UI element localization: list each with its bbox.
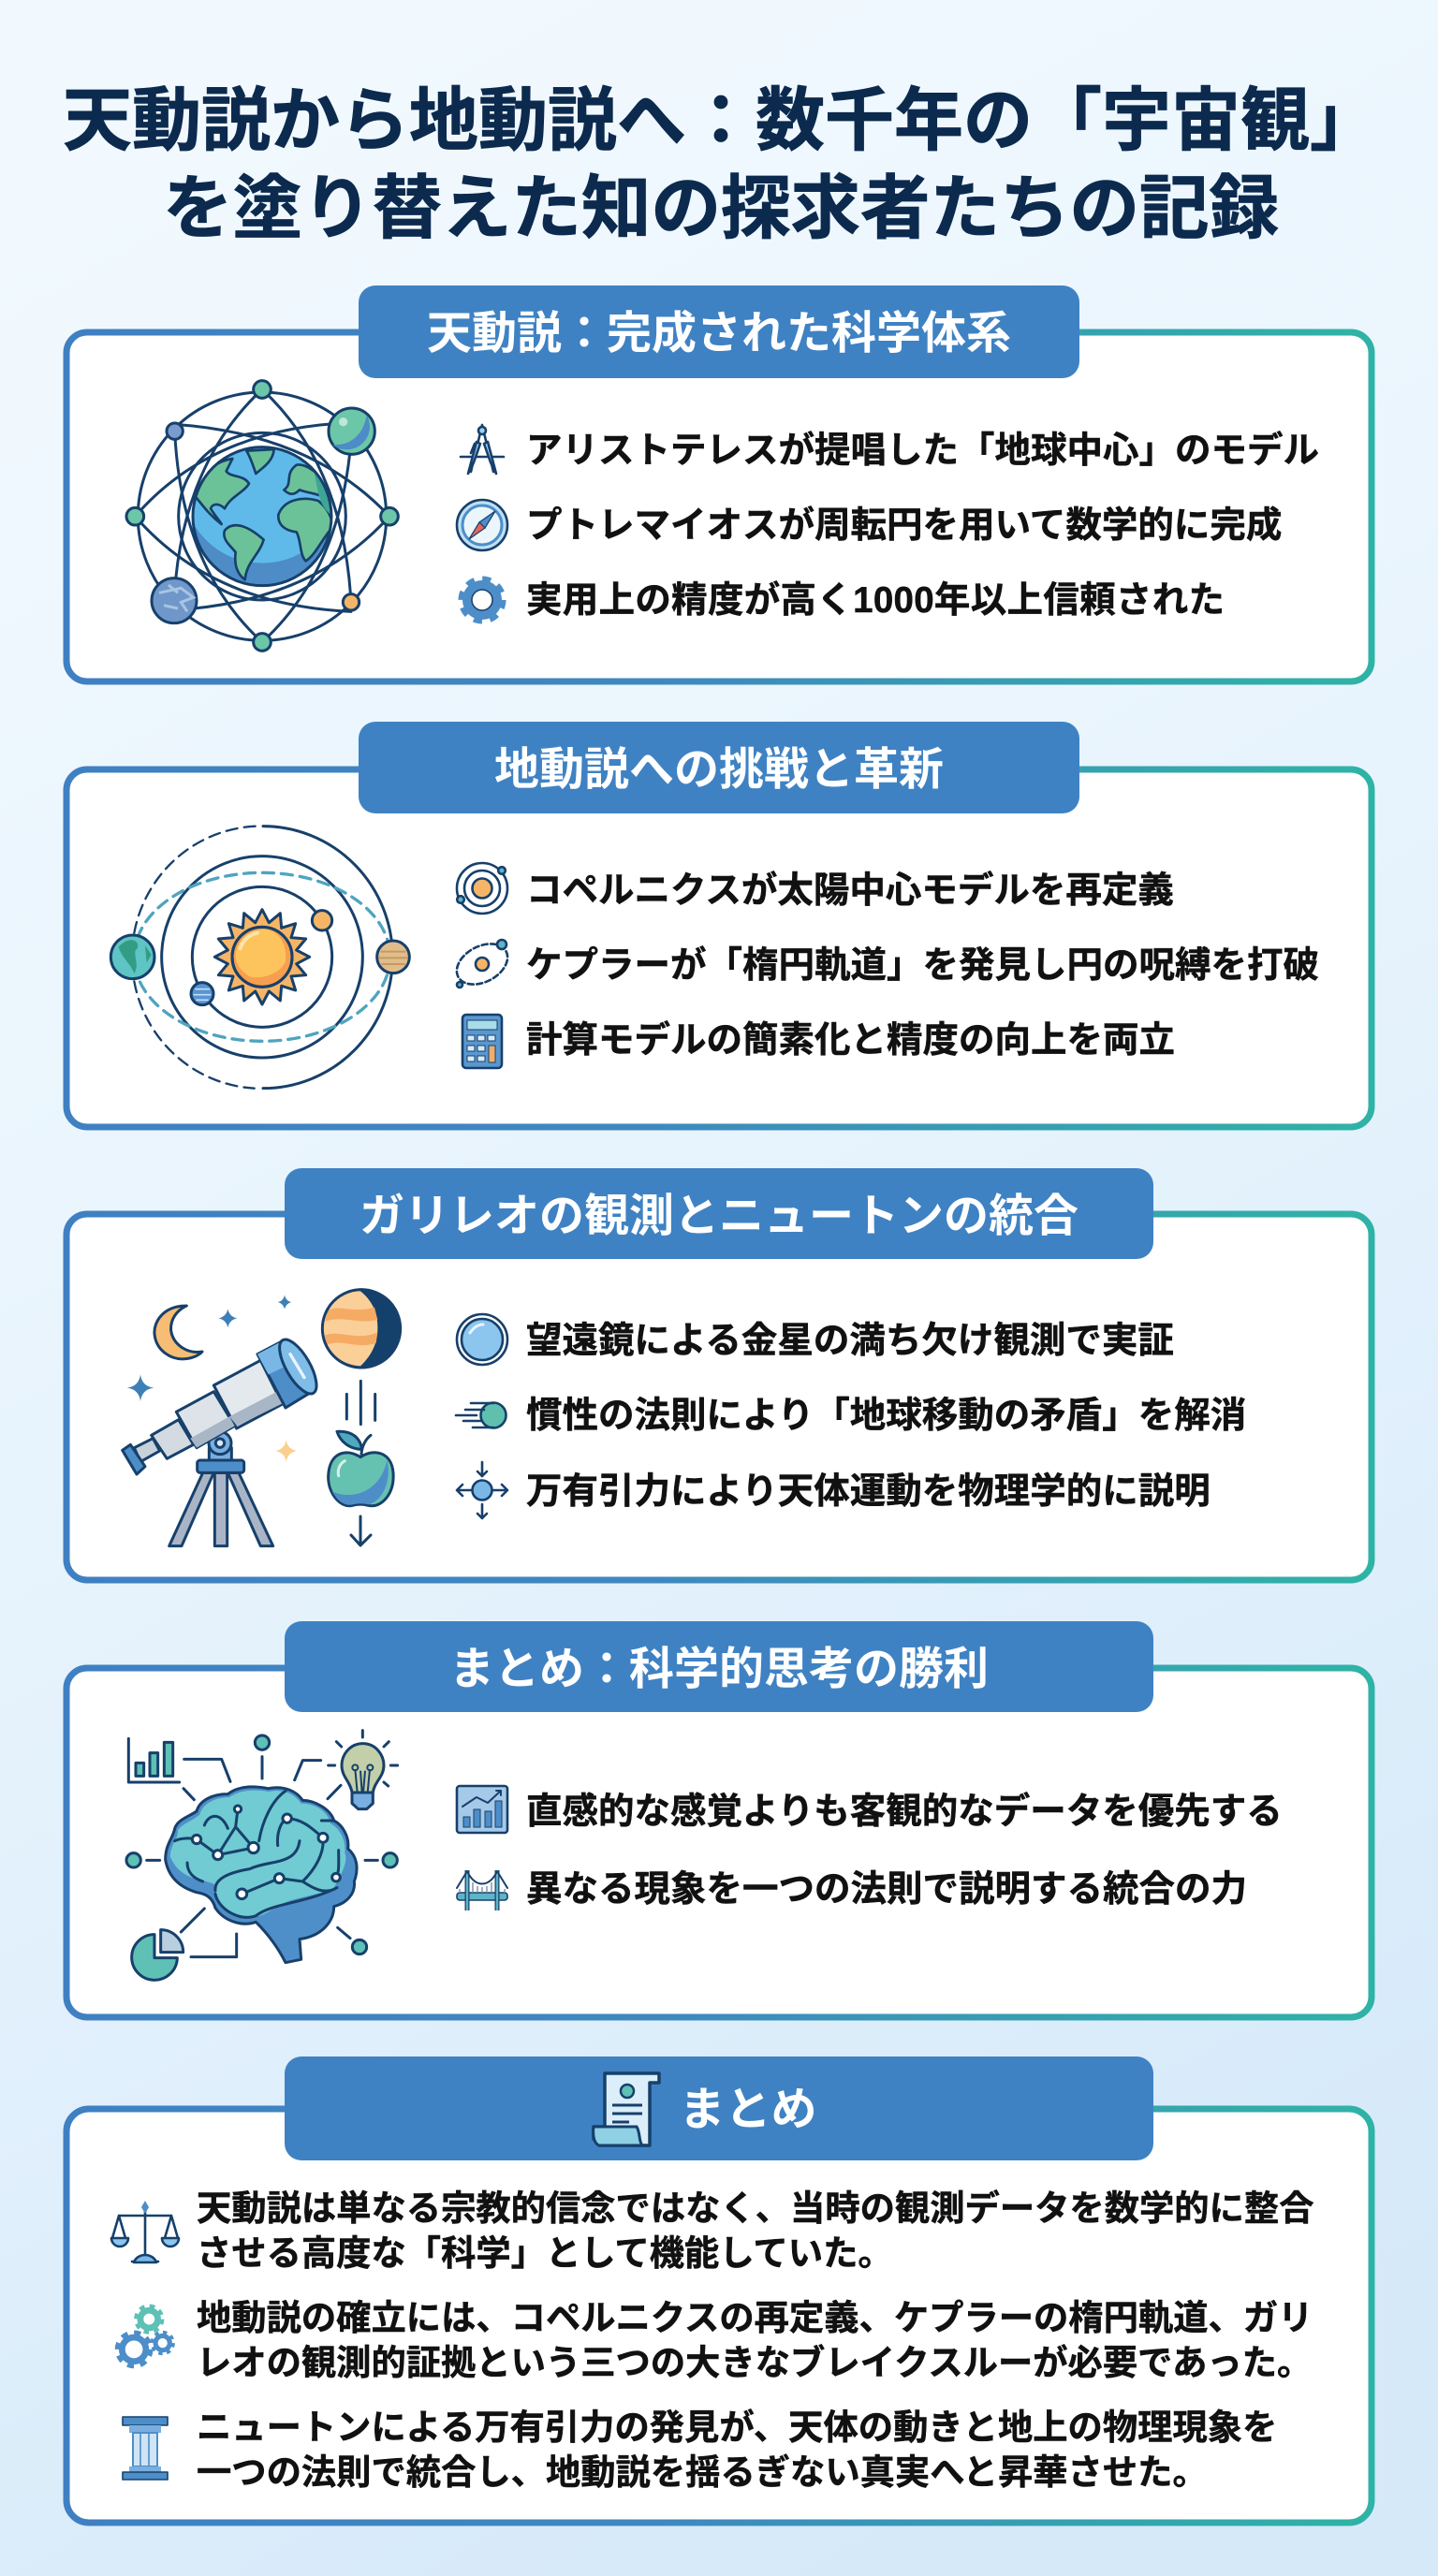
title: を塗り替えた知の探求者たちの記録 <box>163 169 1279 247</box>
header <box>285 1168 1153 1259</box>
header: まとめ：科学的思考の勝利 <box>449 1645 989 1694</box>
sun <box>214 910 310 1004</box>
header: 天動説: 天動説：完成された科学体系 <box>427 309 1011 359</box>
icon: dividers <box>461 425 504 474</box>
bullet text: 望遠鏡による金星の満ち欠け観測で実証 <box>526 1321 1174 1361</box>
header: まとめ <box>679 2085 817 2135</box>
moon <box>154 1306 202 1359</box>
icon: calculator <box>462 1015 502 1068</box>
nodes <box>126 1735 397 1954</box>
title <box>63 81 1379 247</box>
summary text: 一つの法則で統合し、地動説を揺るぎない真実へと昇華させた。 <box>197 2452 1208 2492</box>
icon: pillar <box>123 2417 168 2480</box>
header: 地動説: 地動説への挑戦と革新 <box>494 745 944 795</box>
brain <box>166 1787 357 1963</box>
pie <box>132 1930 183 1980</box>
icon: bridge <box>457 1870 507 1910</box>
icon: gravity arrows <box>457 1462 507 1518</box>
illustration: heliocentric model <box>110 827 409 1089</box>
icon: sun orbit <box>457 863 507 914</box>
bullet text: 異なる現象を一つの法則で説明する統合の力 <box>526 1869 1247 1910</box>
falling lines <box>346 1381 375 1425</box>
summary text: させる高度な「科学」として機能していた。 <box>197 2233 893 2273</box>
planets <box>110 911 409 1005</box>
icon: gear <box>462 580 502 620</box>
header <box>285 2056 1153 2160</box>
summary text: ニュートンによる万有引力の発見が、天体の動きと地上の物理現象を <box>197 2408 1277 2447</box>
bullet text: 実用上の精度が高く1000年以上信頼された <box>526 580 1225 621</box>
icon: moving planet <box>456 1402 506 1428</box>
bullet text <box>526 1321 1246 1512</box>
panel: 天動説 <box>66 285 1372 681</box>
bulb <box>342 1744 384 1809</box>
summary text: 地動説の確立には、コペルニクスの再定義、ケプラーの楕円軌道、ガリ <box>197 2298 1313 2337</box>
header: 天動説 <box>359 285 1079 378</box>
telescope <box>123 1334 324 1474</box>
bullet text: アリストテレスが提唱した「地球中心」のモデル <box>526 430 1319 471</box>
bullet text: ケプラーが「楕円軌道」を発見し円の呪縛を打破 <box>526 945 1319 986</box>
header <box>285 1621 1153 1712</box>
icon: scales <box>111 2201 179 2262</box>
bullet text: 万有引力により天体運動を物理学的に説明 <box>526 1471 1211 1512</box>
panel: まとめ <box>66 2056 1372 2523</box>
bullet text: 慣性の法則により「地球移動の矛盾」を解消 <box>526 1396 1246 1436</box>
summary text: レオの観測的証拠という三つの大きなブレイクスルーが必要であった。 <box>197 2343 1312 2382</box>
panel: 科学的思考の勝利 <box>66 1621 1372 2017</box>
bullet text <box>526 1791 1283 1910</box>
apple <box>329 1431 393 1506</box>
summary text: 天動説は単なる宗教的信念ではなく、当時の観測データを数学的に整合 <box>197 2188 1314 2228</box>
arrow <box>351 1516 371 1545</box>
illustration: brain network <box>126 1731 398 1980</box>
icon: scroll <box>594 2073 659 2145</box>
summary text <box>197 2188 1314 2492</box>
bullet text: コペルニクスが太陽中心モデルを再定義 <box>526 870 1174 911</box>
connectors <box>147 1731 398 1957</box>
tripod <box>169 1432 273 1546</box>
bullet text: プトレマイオスが周転円を用いて数学的に完成 <box>526 505 1282 546</box>
icon: ellipse orbit <box>449 936 515 992</box>
venus <box>321 1290 401 1368</box>
panel: 地動説 <box>66 722 1372 1127</box>
bullet text <box>526 870 1319 1061</box>
icon: gears <box>118 2307 173 2365</box>
panel: ガリレオとニュートン <box>66 1168 1372 1580</box>
bullet text: 直感的な感覚よりも客観的なデータを優先する <box>526 1791 1283 1832</box>
earth <box>191 446 333 588</box>
illustration: geocentric model <box>126 381 398 651</box>
icon: compass <box>457 500 507 550</box>
icon: data chart <box>457 1786 507 1833</box>
bullet text: 計算モデルの簡素化と精度の向上を両立 <box>526 1019 1175 1061</box>
title: 天動説から地動説へ：数千年の「宇宙観」 <box>63 81 1379 159</box>
stars <box>127 1295 297 1462</box>
bullet text <box>526 430 1319 621</box>
illustration: telescope, venus, apple <box>123 1290 401 1546</box>
header: ガリレオの観測とニュートンの統合 <box>360 1192 1078 1241</box>
orbit nodes <box>126 381 398 651</box>
header: 地動説 <box>359 722 1079 813</box>
bar chart <box>128 1738 180 1782</box>
icon: lens <box>457 1314 507 1365</box>
